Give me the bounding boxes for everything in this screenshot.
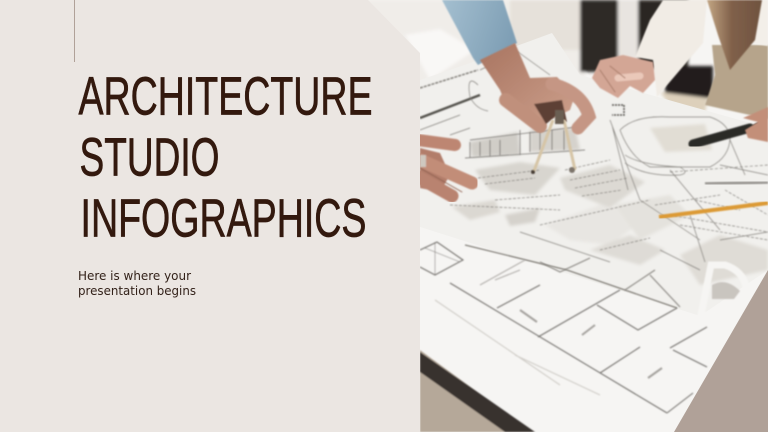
sheet edge shadow [465,245,677,308]
left title panel [0,0,420,432]
left hand with ring [418,140,472,196]
blueprint tone areas [452,124,768,285]
orange pencil [659,203,768,217]
grey pencil [705,182,768,184]
sleeve: blue denim shirt [442,0,517,65]
top white blouse [735,0,768,46]
title: INFOGRAPHICS [80,188,366,248]
subtitle [78,268,196,298]
table corner [420,350,535,432]
corner accent shape [674,270,768,432]
woman's hand [592,55,655,98]
lower blueprint sheet [420,227,768,432]
long hair [707,0,762,70]
woman's white sleeve [635,0,707,97]
blueprint drawing details [420,52,768,270]
title [78,66,372,248]
background wall and furniture [360,0,713,112]
hand holding compass [480,43,589,128]
protractor [701,265,746,317]
upper blueprint sheet [420,33,768,316]
beige skirt [705,45,768,119]
floor plan lines on lower sheet [420,242,707,413]
photo: architects working over blueprints [360,0,768,432]
title: STUDIO [80,128,220,188]
title: ARCHITECTURE [78,66,372,126]
subtitle: Here is where your [78,268,192,283]
accent vertical line [74,0,75,62]
compass [531,110,575,174]
subtitle: presentation begins [78,283,196,298]
right hand [743,107,768,142]
black pen [693,122,762,144]
